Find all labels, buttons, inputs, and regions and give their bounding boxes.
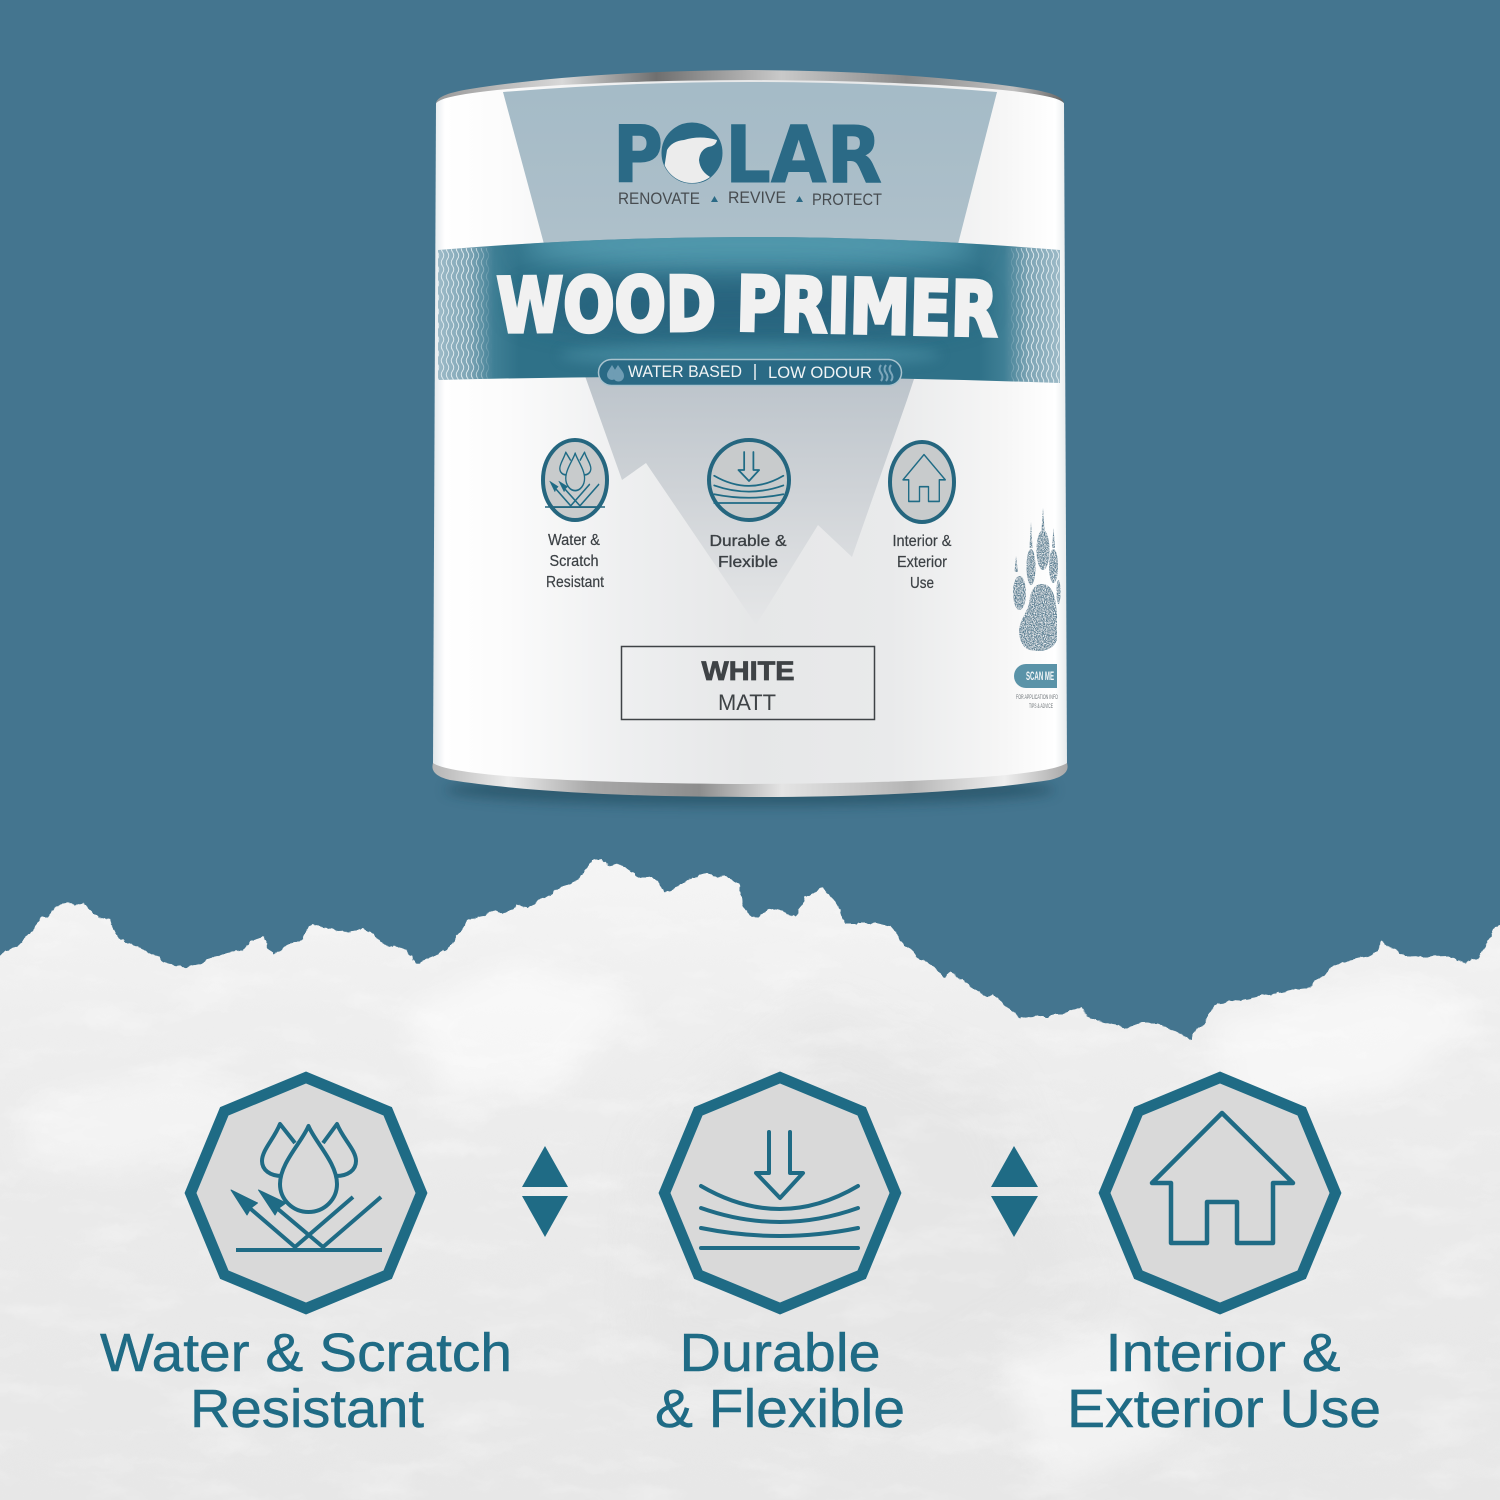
product name [497,260,999,354]
wave pattern right [1008,248,1060,384]
colour box [622,646,874,720]
colour box: MATT [718,690,776,715]
caption: durable and flexible: Durable [680,1323,880,1383]
tin label: water and scratch: Scratch [550,553,598,570]
icon: speckled paw print [1013,508,1060,651]
mountain range [0,850,1500,1500]
product band [438,237,1060,383]
tin label: water and scratch: Resistant [546,574,605,591]
tin label: interior [892,533,952,592]
tin label: durable: Durable & [710,533,787,550]
caption: water and scratch resistant: Resistant [190,1379,424,1439]
tin label: durable: Flexible [718,554,778,571]
colour box: WHITE [702,656,794,686]
tin icon: durable [709,440,789,520]
scan me badge [1014,664,1058,710]
caption: interior and exterior use: Interior & [1106,1323,1340,1383]
tin body [433,74,1067,794]
POLAR logo: P [613,111,663,201]
POLAR logo [618,122,882,184]
tagline [618,189,882,209]
product name: PRIMER [736,260,999,354]
icon: water drops [607,365,624,382]
separator triangles 2 [991,1146,1038,1237]
logo bear circle [662,122,722,184]
product name: WOOD [497,260,716,350]
POLAR logo: LAR [725,111,882,201]
badge: water and scratch resistant [190,1078,422,1308]
tagline: REVIVE [728,189,786,207]
caption: water and scratch resistant: Water & Scratch [100,1323,512,1383]
icon: odour waves [880,365,892,381]
tin icon: water and scratch [543,440,607,520]
tin label: interior: Exterior [897,554,947,571]
scan me badge: FOR APPLICATION INFO [1016,694,1058,701]
wave pattern left [438,248,492,382]
upper label triangle [503,82,997,244]
paint tin [432,70,1068,806]
caption: durable and flexible [655,1323,905,1439]
tin label: water and scratch [546,532,605,591]
bottom rim [432,763,1068,797]
scan me badge: TIPS & ADVICE [1029,703,1053,710]
tin label: interior: Interior & [892,533,952,550]
badge: durable and flexible [664,1078,896,1308]
caption: interior and exterior use [1067,1323,1381,1439]
scan me badge: SCAN ME [1026,671,1054,683]
tagline: RENOVATE [618,190,700,208]
caption: interior and exterior use: Exterior Use [1067,1379,1381,1439]
POLAR logo: O [662,111,723,201]
tin label: water and scratch: Water & [548,532,601,549]
caption: durable and flexible: & Flexible [655,1379,905,1439]
pill: water based low odour: WATER BASED [628,362,742,381]
pill: water based low odour [598,360,902,386]
pill: water based low odour: LOW ODOUR [768,363,872,382]
tin label: durable [710,533,787,571]
tin label: interior: Use [910,575,934,592]
caption: water and scratch resistant [100,1323,512,1439]
tin shadow [445,774,1055,806]
separator triangles 1 [522,1146,568,1237]
badge: interior and exterior [1104,1078,1336,1308]
tagline: PROTECT [812,191,882,209]
top rim [436,70,1064,104]
lower label triangle with mountain notch [585,376,915,625]
tin icon: house [890,442,954,522]
